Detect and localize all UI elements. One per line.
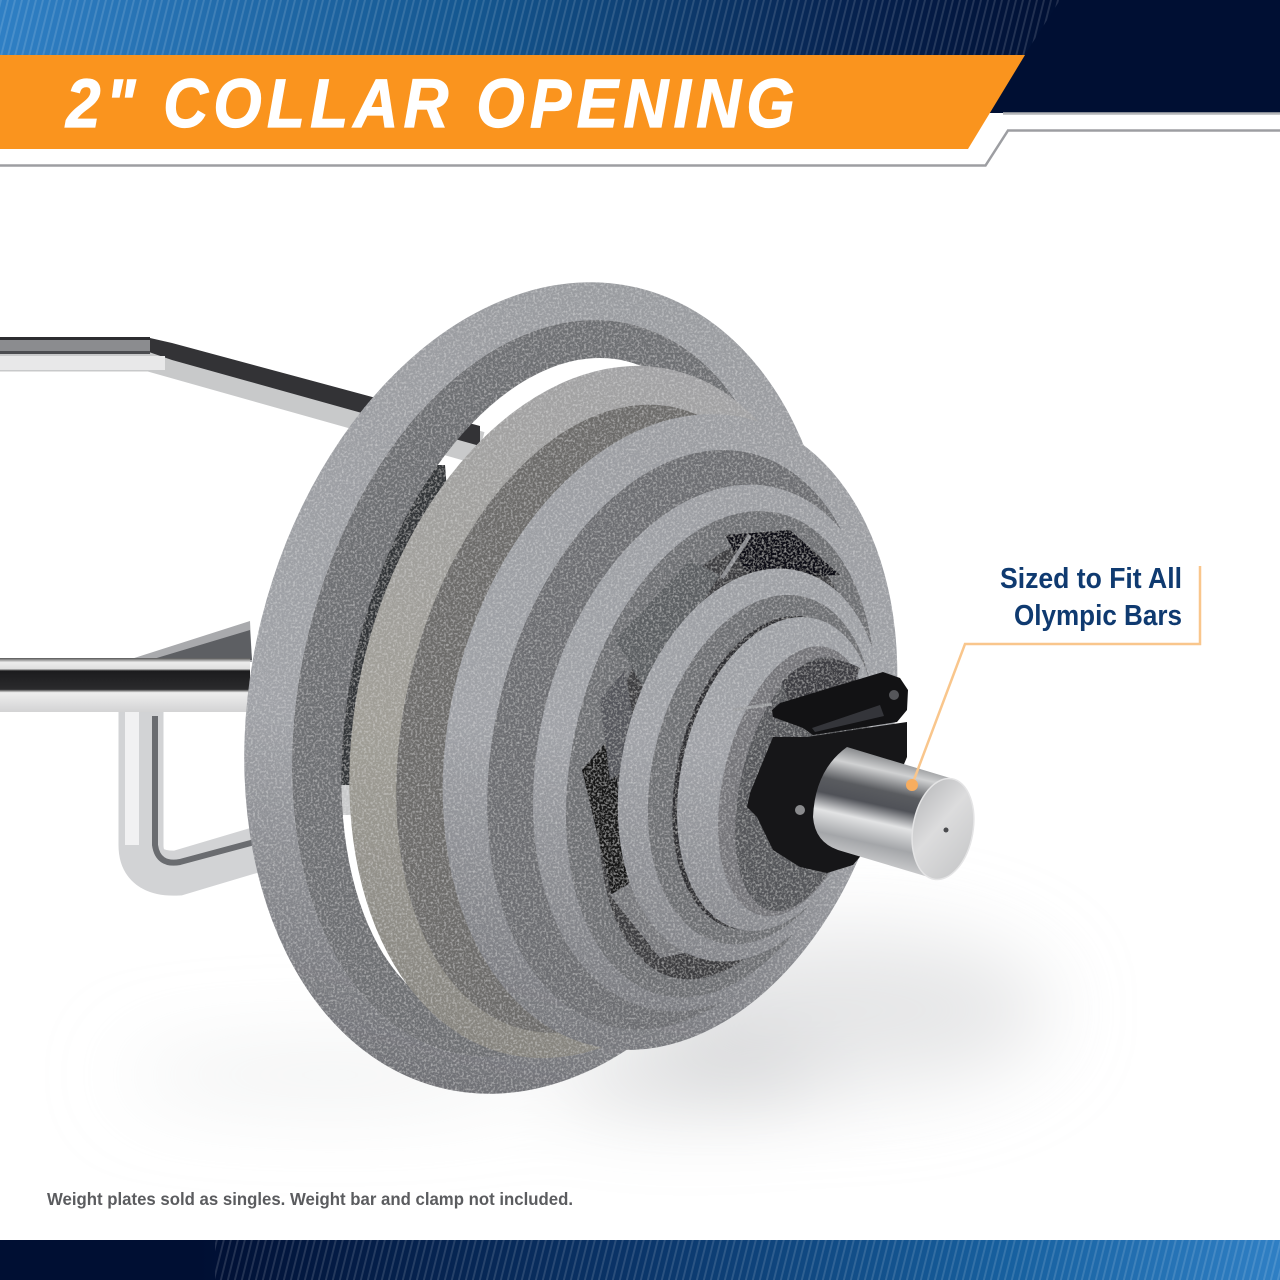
middle rail [0,658,250,712]
weight plates stack [162,219,962,1157]
floor shadow [120,930,1050,1101]
header rule lines [0,114,1280,166]
plate 1: largest back plate [162,219,918,1157]
title: 2" COLLAR OPENING [64,65,800,142]
rear bracket [128,621,252,662]
center hole [944,828,948,832]
callout text [1000,563,1182,632]
callout text: Sized to Fit All [1000,563,1182,595]
clamp lever [772,672,908,735]
navy corner block [900,0,1280,113]
plate 2: beige plate [280,314,900,1110]
sleeve end face [905,774,981,884]
footer band [0,1240,1280,1280]
callout text: Olympic Bars [1014,600,1182,632]
lever ribs [812,705,884,732]
white step under the navy block [960,113,1280,166]
barbell sleeve end [813,747,981,884]
clamp ring [747,722,907,873]
footnote: Weight plates sold as singles. Weight bar and clamp not included. [47,1189,573,1209]
dark rack seen through the back plate [335,465,470,815]
orange title banner [0,55,1025,149]
clamp hinge pin [795,805,805,815]
lever pin [889,690,899,700]
header band [0,0,1280,166]
plate 4 [480,446,944,1050]
plate 4 hub: black gaps and spokes [582,530,840,958]
sleeve collar clamp [747,672,908,873]
plate 6 hub detail [733,659,860,710]
plate 6: smallest front plate [646,596,908,952]
sleeve body [813,747,950,879]
striped blue band [0,0,1060,56]
plate 5 [578,540,924,990]
callout: leader line and dot [906,566,1200,791]
plate 3 [378,365,962,1099]
upright tube [132,712,262,873]
chrome weight tree rack [0,337,480,873]
top rail [0,337,480,448]
